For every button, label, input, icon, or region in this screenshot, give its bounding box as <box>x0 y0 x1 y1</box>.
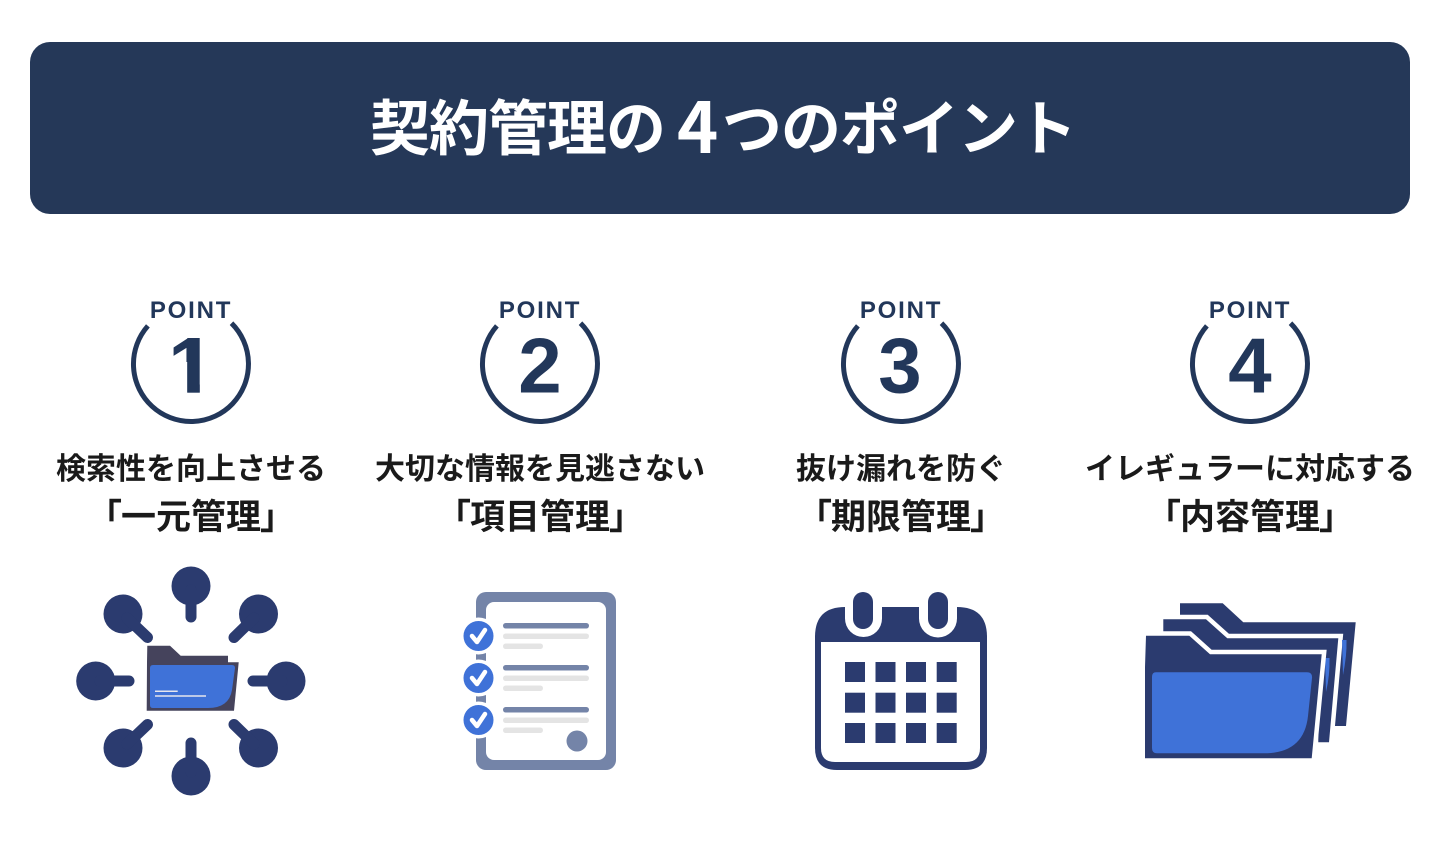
point 1 column <box>56 297 326 796</box>
point 1 text: 「一元管理」 <box>87 489 295 540</box>
point 4 badge: POINT <box>1209 297 1291 324</box>
point 2 text: 「項目管理」 <box>436 489 644 540</box>
point 2 text: 大切な情報を見逃さない <box>375 444 705 488</box>
point 1 badge: POINT <box>150 297 232 324</box>
point 3 badge <box>843 297 958 421</box>
point 1 text <box>56 444 326 540</box>
point 4 text: 「内容管理」 <box>1146 489 1354 540</box>
point 3 badge: POINT <box>860 297 942 324</box>
point 3 text: 抜け漏れを防ぐ <box>796 444 1006 488</box>
point 4 text: イレギュラーに対応する <box>1085 444 1415 488</box>
point 2 badge <box>482 297 597 421</box>
point 1 badge <box>133 297 248 421</box>
icon: calendar <box>815 592 987 770</box>
point 2 column <box>375 297 705 770</box>
point 3 text <box>796 444 1006 540</box>
point 4 badge: 4 <box>1228 322 1272 410</box>
title: 契約管理の <box>370 81 665 168</box>
icon: stacked folders <box>1145 603 1356 758</box>
point 4 column <box>1085 297 1415 758</box>
point 3 column <box>796 297 1006 770</box>
point 3 text: 「期限管理」 <box>797 489 1005 540</box>
point 4 text <box>1085 444 1415 540</box>
point 1 badge: 1 <box>168 322 212 410</box>
icon: folder with search nodes <box>76 566 306 796</box>
point 3 badge: 3 <box>878 322 922 410</box>
title: 4 <box>677 73 718 174</box>
point 2 badge: 2 <box>518 322 562 410</box>
point 1 text: 検索性を向上させる <box>56 444 326 488</box>
point 2 badge: POINT <box>499 297 581 324</box>
point 2 text <box>375 444 705 540</box>
title banner <box>30 42 1410 214</box>
icon: checklist document <box>462 592 616 770</box>
title: つのポイント <box>722 81 1076 168</box>
point 4 badge <box>1192 297 1307 421</box>
